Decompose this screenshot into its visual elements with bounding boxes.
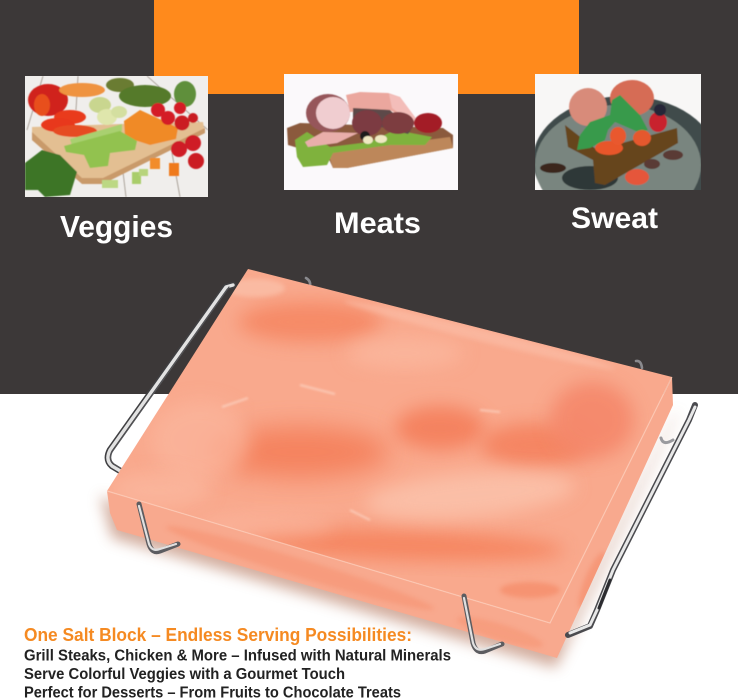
caption heading: One Salt Block – Endless Serving Possibilities: bbox=[24, 624, 412, 645]
side face mottling bbox=[168, 526, 605, 647]
photo: sweet dessert bbox=[535, 74, 701, 190]
label: Veggies: Veggies bbox=[60, 209, 173, 244]
rear wire rack handle bbox=[108, 278, 642, 472]
block top face bbox=[107, 269, 672, 623]
rear hook right bbox=[636, 361, 642, 368]
photo: meats bbox=[284, 74, 458, 190]
salt block bbox=[107, 269, 673, 658]
rear hook left bbox=[306, 278, 310, 286]
salt block soft shadow bbox=[100, 408, 680, 668]
label: Meats: Meats bbox=[334, 207, 421, 240]
front right wire clip bbox=[464, 596, 502, 652]
photo: veggies bbox=[25, 76, 208, 197]
dark background panel bbox=[0, 0, 738, 394]
caption line 1: Grill Steaks, Chicken & More – Infused with Natural Minerals bbox=[24, 648, 451, 664]
small right hook bbox=[661, 438, 673, 443]
block front and right faces bbox=[107, 377, 673, 658]
orange header bar bbox=[154, 0, 579, 94]
right wire rack handle bbox=[568, 405, 695, 635]
caption line 2: Serve Colorful Veggies with a Gourmet Touch bbox=[24, 666, 345, 683]
front left wire clip bbox=[139, 504, 178, 552]
top surface mottling bbox=[110, 279, 634, 598]
caption text block bbox=[24, 624, 451, 700]
label: Sweat: Sweat bbox=[571, 202, 658, 235]
